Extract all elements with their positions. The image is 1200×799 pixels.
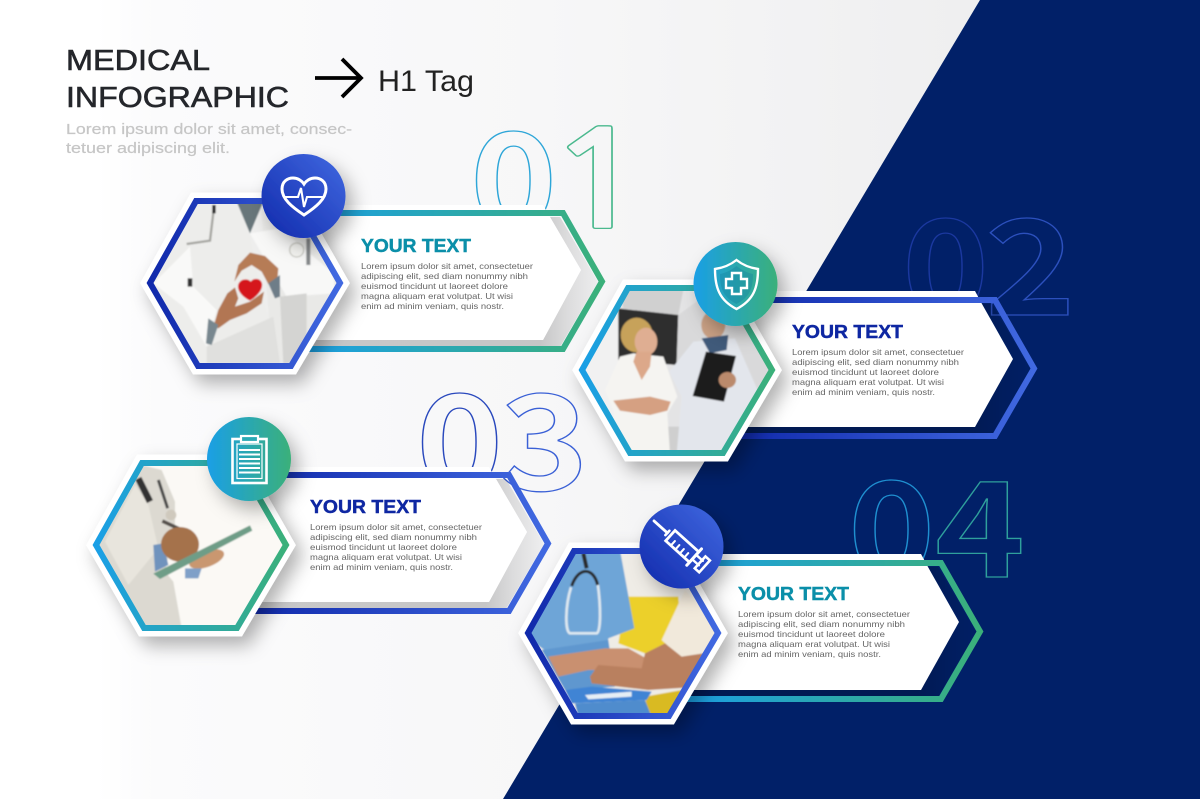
photo: doctor writing on clipboard bbox=[100, 466, 282, 625]
body text bbox=[738, 609, 910, 659]
title: MEDICAL bbox=[66, 45, 210, 77]
photo: doctor holding red heart bbox=[154, 204, 336, 363]
ribbon frame bbox=[300, 205, 602, 349]
body text: adipiscing elit, sed diam nonummy nibh bbox=[792, 357, 959, 367]
panel: step 4 bbox=[518, 479, 1022, 739]
body text: magna aliquam erat volutpat. Ut wisi bbox=[738, 639, 890, 649]
icon circle bbox=[207, 417, 291, 501]
number 01 bbox=[470, 75, 652, 267]
heading: YOUR TEXT bbox=[738, 584, 849, 604]
number 02: 0 bbox=[902, 162, 989, 354]
number 02: 2 bbox=[985, 163, 1076, 354]
number 04: 4 bbox=[935, 425, 1025, 616]
subtitle text: Lorem ipsum dolor sit amet, consec- bbox=[66, 122, 352, 138]
icon circle bbox=[694, 242, 778, 326]
body text: adipiscing elit, sed diam nonummy nibh bbox=[738, 619, 905, 629]
body text bbox=[361, 261, 533, 311]
number 03: 0 bbox=[416, 337, 503, 529]
hexagon outline bbox=[150, 201, 340, 366]
icon: heart with pulse bbox=[282, 178, 326, 215]
title: INFOGRAPHIC bbox=[66, 82, 289, 114]
body text: adipiscing elit, sed diam nonummy nibh bbox=[361, 271, 528, 281]
body text: enim ad minim veniam, quis nostr. bbox=[792, 387, 935, 397]
body text: enim ad minim veniam, quis nostr. bbox=[361, 301, 504, 311]
hexagon frame bbox=[96, 463, 286, 628]
body text: Lorem ipsum dolor sit amet, consectetuer bbox=[310, 522, 482, 532]
body text bbox=[792, 347, 964, 397]
hexagon outline bbox=[582, 288, 772, 453]
body text: magna aliquam erat volutpat. Ut wisi bbox=[792, 377, 944, 387]
body text: enim ad minim veniam, quis nostr. bbox=[738, 649, 881, 659]
number 03: 3 bbox=[500, 337, 589, 528]
H1 tag label: H1 Tag bbox=[378, 65, 474, 98]
hexagon outline bbox=[96, 463, 286, 628]
heading: YOUR TEXT bbox=[361, 236, 471, 256]
body text: magna aliquam erat volutpat. Ut wisi bbox=[361, 291, 513, 301]
number 02 bbox=[902, 162, 1076, 354]
body text: adipiscing elit, sed diam nonummy nibh bbox=[310, 532, 477, 542]
title bbox=[66, 45, 289, 114]
icon: shield with cross bbox=[715, 260, 758, 309]
subtitle text bbox=[66, 122, 352, 157]
heading: YOUR TEXT bbox=[310, 497, 421, 517]
body text: magna aliquam erat volutpat. Ut wisi bbox=[310, 552, 462, 562]
icon circle bbox=[262, 154, 346, 238]
photo: doctor with senior patient bbox=[586, 291, 768, 450]
number 03 bbox=[416, 337, 589, 529]
panel: step 1 bbox=[140, 125, 613, 394]
body text: euismod tincidunt ut laoreet dolore bbox=[738, 629, 885, 639]
subtitle text: tetuer adipiscing elit. bbox=[66, 141, 230, 157]
hexagon frame bbox=[150, 201, 340, 366]
panel: step 3 bbox=[86, 392, 582, 656]
number 04 bbox=[848, 424, 1025, 616]
arrow bbox=[315, 59, 361, 97]
body text: enim ad minim veniam, quis nostr. bbox=[310, 562, 453, 572]
body text: Lorem ipsum dolor sit amet, consectetuer bbox=[738, 609, 910, 619]
number 01: 1 bbox=[545, 116, 652, 249]
ribbon frame bbox=[678, 554, 980, 699]
hexagon frame bbox=[582, 288, 772, 453]
icon: clipboard bbox=[232, 436, 266, 483]
body text: euismod tincidunt ut laoreet dolore bbox=[792, 367, 939, 377]
navy diagonal panel bbox=[503, 0, 1200, 799]
hexagon frame bbox=[528, 551, 718, 716]
number 01: 0 bbox=[470, 75, 557, 267]
body text: Lorem ipsum dolor sit amet, consectetuer bbox=[792, 347, 964, 357]
number 04: 0 bbox=[848, 424, 935, 616]
body text: euismod tincidunt ut laoreet dolore bbox=[361, 281, 508, 291]
body text bbox=[310, 522, 482, 572]
icon circle bbox=[640, 504, 724, 588]
heading: YOUR TEXT bbox=[792, 322, 903, 342]
icon: syringe bbox=[647, 513, 712, 575]
ribbon frame bbox=[732, 291, 1034, 436]
photo: nurse holding patient's hands bbox=[532, 554, 714, 713]
ribbon frame bbox=[246, 467, 548, 611]
body text: euismod tincidunt ut laoreet dolore bbox=[310, 542, 457, 552]
body text: Lorem ipsum dolor sit amet, consectetuer bbox=[361, 261, 533, 271]
panel: step 2 bbox=[572, 217, 1069, 481]
hexagon outline bbox=[528, 551, 718, 716]
